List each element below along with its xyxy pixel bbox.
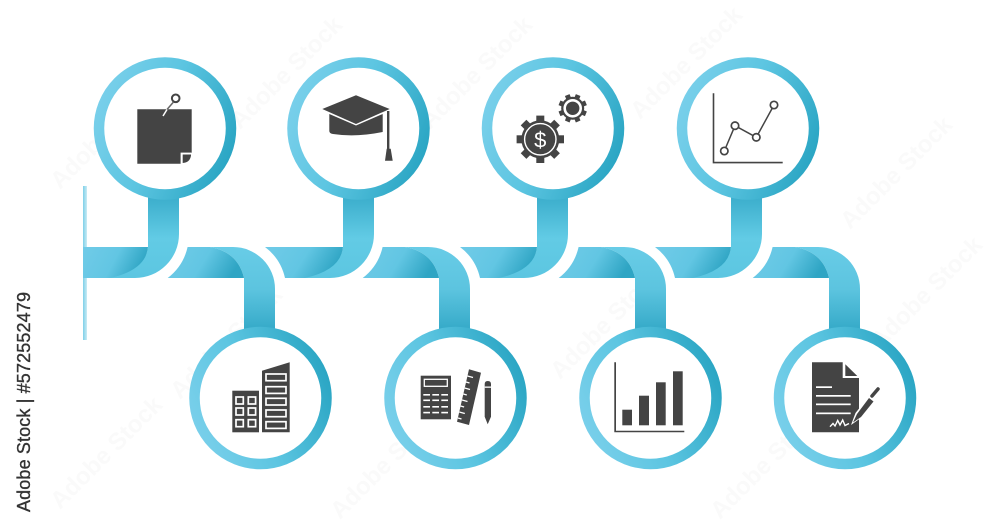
watermark pattern: Adobe Stock [865,231,988,354]
icon: gears with dollar [517,94,587,163]
ribbon segment 3 (up) [265,190,374,278]
icon: line chart [714,93,783,163]
ring: sticky note [99,62,231,194]
watermark pattern: Adobe Stock [545,261,668,384]
watermark pattern: Adobe Stock [225,11,348,134]
icon: sticky note [137,94,192,164]
watermark pattern: Adobe Stock [625,1,748,124]
watermark pattern: Adobe Stock [415,11,538,134]
icon: graduation cap [322,95,393,161]
small gear [559,94,587,122]
ribbon segment 2 (down) [168,247,275,332]
ribbon segment 1 (up) [83,190,179,278]
watermark pattern: Adobe Stock [165,281,288,404]
ring: gears [487,62,619,194]
icon: calculator, ruler and pencil [421,369,491,425]
ring: contract [779,332,911,464]
watermark pattern: Adobe Stock [45,71,168,194]
ring: calculator [390,332,522,464]
icon: bar chart [614,362,684,432]
watermark pattern: Adobe Stock [705,401,828,524]
ribbon segment 8 (down) [753,247,860,332]
ring: graduation cap [292,62,424,194]
ring: line chart [682,62,814,194]
stock image caption: Adobe Stock | #572552479 [14,292,34,512]
ribbon segment 7 (up) [655,190,762,278]
vertical start bar [83,186,87,340]
large gear: $ [534,128,546,152]
watermark pattern: Adobe Stock [325,401,448,524]
ribbon segment 6 (down) [559,247,666,332]
ring: buildings [194,332,326,464]
icon: buildings [232,362,290,432]
watermark pattern: Adobe Stock [835,111,958,234]
ribbon segment 4 (down) [363,247,470,332]
icon: signed contract [812,362,879,432]
watermark pattern: Adobe Stock [45,391,168,514]
ribbon segment 5 (up) [460,190,568,278]
ring: bar chart [584,332,716,464]
